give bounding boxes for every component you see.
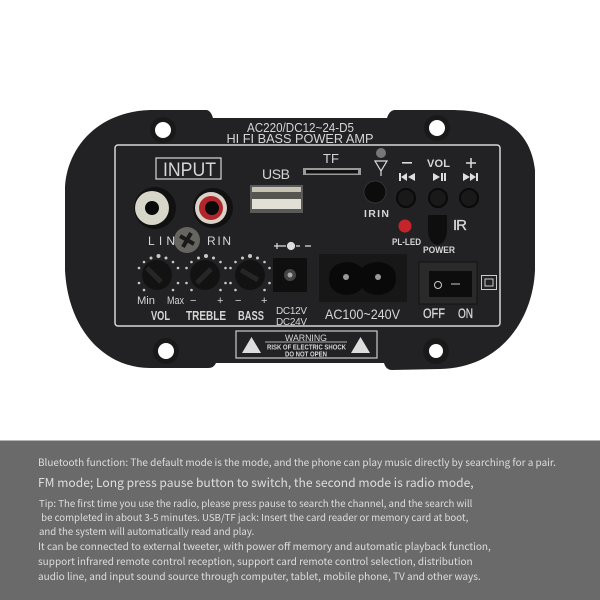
input label: INPUT	[163, 160, 216, 181]
off on labels: ON	[458, 306, 473, 321]
treble knob	[185, 254, 227, 291]
knob labels: Max	[167, 295, 184, 307]
RCA jack: white	[134, 187, 176, 229]
knob labels: −	[235, 295, 241, 307]
caption: tip	[39, 496, 472, 538]
caption: tip: and the system will automatically read and play.	[39, 524, 254, 538]
screw	[174, 227, 200, 253]
DC jack	[273, 258, 307, 292]
knob labels: +	[261, 295, 267, 307]
DC labels: DC24V	[276, 317, 307, 328]
TF label: TF	[323, 151, 339, 166]
warning label: RISK OF ELECTRIC SHOCK	[267, 344, 346, 352]
IR input jack: IRIN	[364, 208, 389, 220]
input channel labels: LIN	[148, 234, 175, 248]
IR receiver	[428, 215, 467, 245]
buttons	[397, 189, 478, 207]
DC polarity symbol	[274, 242, 311, 250]
mounting holes	[150, 115, 450, 364]
model heading: HI FI BASS POWER AMP	[226, 132, 374, 146]
rocker switch	[419, 262, 477, 304]
knob labels: Min	[137, 295, 155, 307]
USB label: USB	[262, 166, 290, 182]
RCA jack: red	[193, 188, 233, 228]
caption: tip: Tip: The first time you use the radio, please press pause to search the channel, and the search will	[39, 496, 472, 510]
input channel labels: RIN	[207, 234, 231, 248]
knob labels: VOL	[151, 308, 170, 323]
knob labels: +	[217, 295, 223, 307]
volume button labels: VOL	[427, 158, 450, 170]
off on labels: OFF	[423, 306, 445, 321]
knob labels: BASS	[238, 308, 264, 323]
caption: features: audio line, and input sound source through computer, tablet, mobile phone, TV and other ways.	[38, 568, 481, 583]
IR receiver: IR	[453, 217, 467, 234]
IR input jack	[364, 181, 389, 220]
DC labels: DC12V	[276, 306, 307, 317]
TF slot	[303, 168, 361, 175]
warning label: DO NOT OPEN	[285, 352, 327, 358]
metal plate	[65, 110, 535, 370]
warning label: WARNING	[285, 333, 327, 343]
double-insulation icon	[482, 276, 496, 290]
input channel labels	[148, 234, 231, 248]
antenna icon	[375, 148, 387, 176]
model heading: AC220/DC12~24-D5	[247, 121, 354, 135]
knob labels	[137, 295, 267, 323]
AC socket	[319, 254, 407, 302]
volume knob	[138, 254, 179, 291]
caption: tip: be completed in about 3-5 minutes. USB/TF jack: Insert the card reader or memory card at boot,	[41, 510, 468, 524]
knob labels: TREBLE	[186, 308, 226, 323]
off on labels	[423, 306, 473, 321]
power LED	[392, 220, 421, 247]
knob labels: −	[190, 295, 196, 307]
caption: features	[38, 538, 491, 583]
model heading	[226, 121, 374, 146]
USB port	[250, 185, 303, 213]
power LED: PL-LED	[392, 237, 421, 247]
caption: features: support infrared remote control reception, support card remote control selection, distribution	[38, 553, 473, 568]
amplifier panel photo	[0, 110, 600, 441]
bass knob	[229, 254, 271, 291]
warning label	[236, 331, 377, 358]
caption panel	[0, 441, 600, 600]
AC label: AC100~240V	[325, 306, 401, 322]
DC labels	[276, 306, 307, 328]
caption: features: It can be connected to external tweeter, with power off memory and automatic playback function,	[38, 538, 491, 553]
inner frame	[115, 145, 500, 326]
power label: POWER	[423, 245, 455, 255]
caption: bluetooth function: Bluetooth function: The default mode is the mode, and the phone can play music directly by searching for a pair.	[38, 454, 556, 469]
caption: FM mode: FM mode; Long press pause button to switch, the second mode is radio mode,	[38, 474, 474, 491]
volume button labels	[399, 158, 478, 181]
